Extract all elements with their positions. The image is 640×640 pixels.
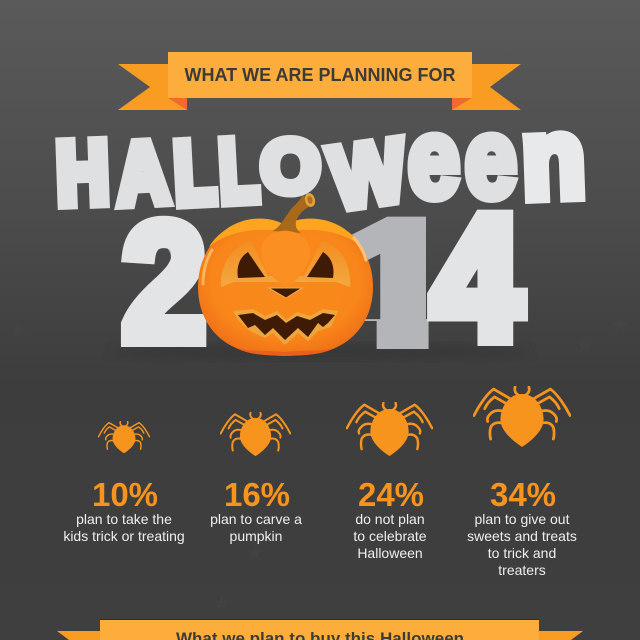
label: 10 percent text: 10% [92,476,158,513]
banner: what we are planning for [118,52,521,110]
label: 24 percent text [353,476,427,561]
text: ★ [212,590,232,615]
text: ★ [8,318,28,343]
label: 10 percent text: plan to take the [76,511,172,527]
label: 34 percent text: treaters [498,562,546,578]
label: 24 percent text: 24% [358,476,424,513]
title: Halloween lettering: L [217,120,261,221]
title: Halloween lettering: e [465,96,517,221]
text: ★ [575,332,595,357]
title: Halloween lettering: H [55,122,110,223]
icon: small spider [98,421,150,454]
label: 24 percent text: do not plan [355,511,425,527]
pumpkin stem [272,192,317,233]
label: 16 percent text: pumpkin [230,528,282,544]
text: ★ [610,312,630,337]
icon: largest spider [473,386,571,447]
eye sockets [221,241,350,287]
pumpkin body [198,219,373,356]
banner: what we plan to buy [57,619,583,640]
label: 16 percent text: 16% [224,476,290,513]
title: Halloween lettering [55,95,587,228]
title: Halloween lettering: W [324,120,412,228]
year digits: 2, 1, 4: 2 [122,188,206,376]
label: 34 percent text: to trick and [488,545,556,561]
text: ★ [245,540,265,565]
nose lobe [261,231,310,288]
label: 10 percent text [63,476,185,544]
nose [269,288,302,298]
title: Halloween lettering: L [172,122,218,223]
label: 16 percent text [210,476,302,544]
icon: large spider [346,402,433,456]
year digits: 2, 1, 4 [120,181,528,376]
label: 16 percent text: plan to carve a [210,511,302,527]
title: Halloween lettering: O [261,125,320,208]
label: 34 percent text [467,476,577,578]
stat: 34% [467,386,577,578]
label: 24 percent text: to celebrate [353,528,427,544]
label: 34 percent text: sweets and treats [467,528,577,544]
banner: what we are planning for: WHAT WE ARE PLANNING FOR [184,65,455,85]
title: Halloween lettering: e [408,96,460,221]
stat: 24% [346,402,433,561]
title: Halloween lettering: n [520,95,587,222]
icon: jack-o-lantern pumpkin [198,193,373,356]
label: 10 percent text: kids trick or treating [63,528,185,544]
label: 34 percent text: plan to give out [475,511,569,527]
mouth [233,309,338,345]
year digits: 2, 1, 4: 1 [336,186,460,381]
label: 34 percent text: 34% [490,476,556,513]
stat: 10% [63,421,185,544]
title: Halloween lettering: A [115,121,171,223]
stat: 16% [210,412,302,544]
label: 24 percent text: Halloween [357,545,423,561]
year digits: 2, 1, 4: 4 [432,181,522,376]
icon: medium spider [220,412,291,456]
